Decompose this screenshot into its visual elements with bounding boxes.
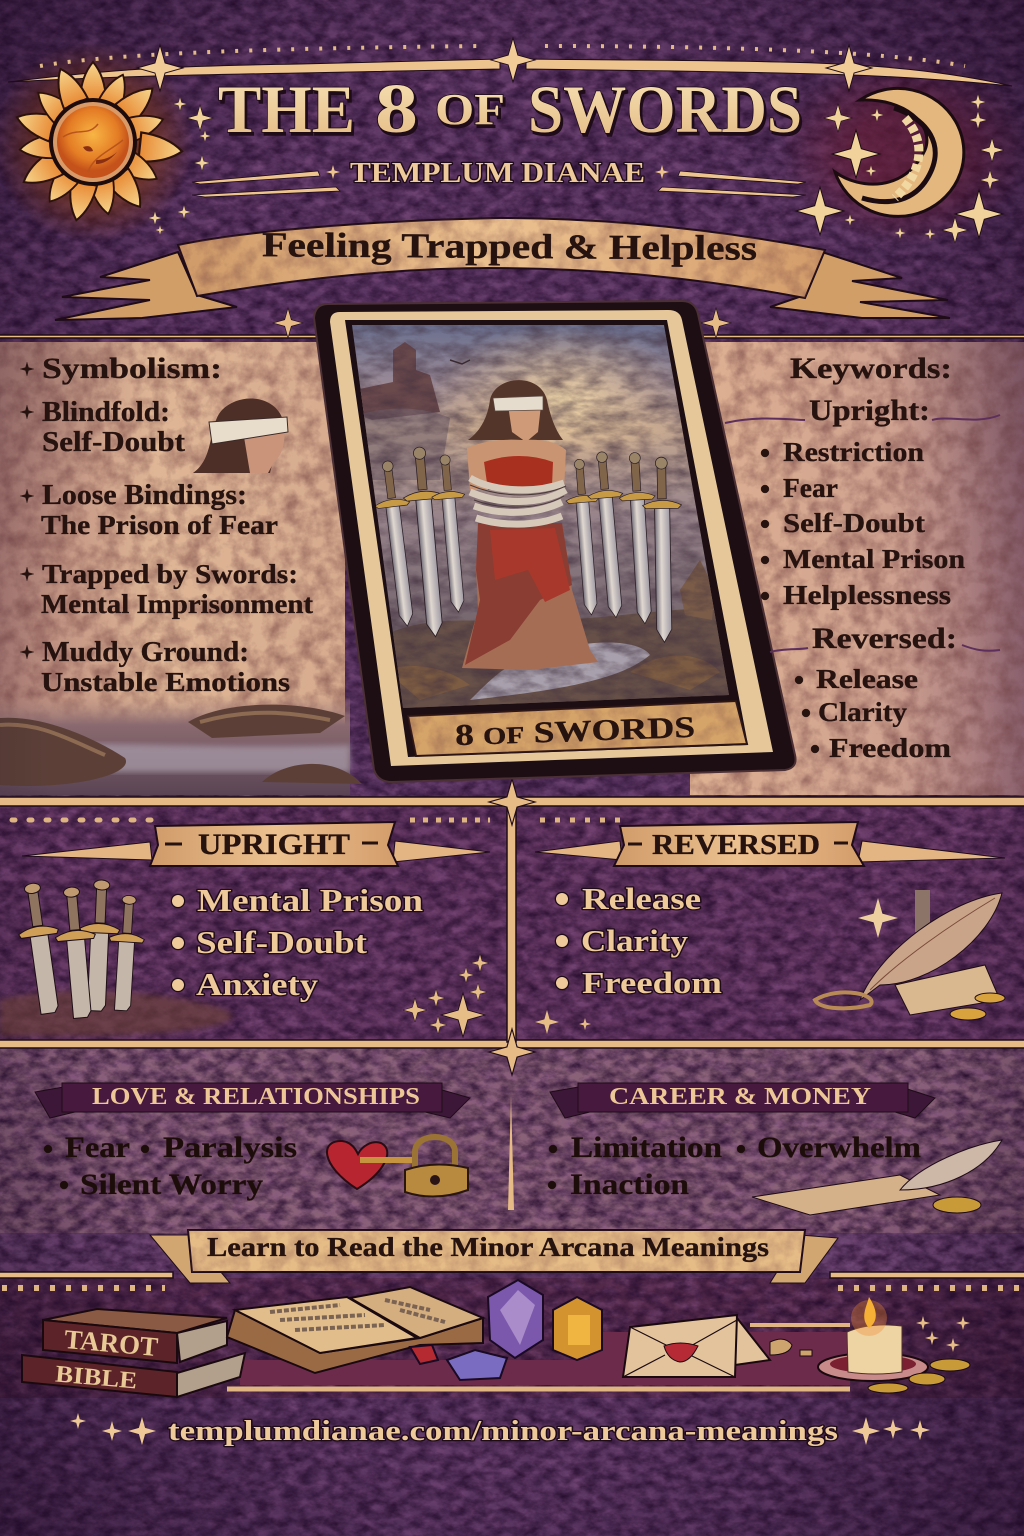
icon: moon and stars [148, 88, 1004, 243]
keywords text: Freedom [829, 733, 952, 763]
icon: quill and letter [815, 890, 1005, 1020]
symbolism text [20, 352, 313, 697]
panel: reversed: REVERSED [652, 829, 820, 861]
icon: quill and papers [752, 1140, 1002, 1215]
footer shelf [2, 1288, 1024, 1389]
tarot card: 8 OF SWORDS [455, 711, 696, 752]
panel: love and relationships: Paralysis [163, 1131, 297, 1164]
keywords text: Reversed: [812, 622, 957, 655]
panel: career and money: Inaction [570, 1168, 689, 1201]
panel: career and money: CAREER & MONEY [609, 1084, 871, 1110]
subtitle [192, 157, 806, 197]
symbolism text: Symbolism: [42, 352, 222, 385]
symbolism text: Trapped by Swords: [42, 559, 298, 589]
keywords text: Keywords: [790, 352, 952, 385]
panel: reversed: Release [582, 881, 701, 916]
panel: love and relationships: Fear [65, 1131, 130, 1164]
divider lines [0, 308, 1024, 1278]
keywords text: Restriction [783, 437, 924, 467]
panel: upright: Anxiety [196, 966, 318, 1002]
icon: books [22, 1309, 245, 1397]
symbolism text: Muddy Ground: [42, 637, 249, 668]
card illustration [340, 320, 740, 715]
keywords text: Clarity [818, 697, 908, 727]
url: templumdianae.com/minor-arcana-meanings [168, 1415, 838, 1447]
panel: upright: Self-Doubt [196, 924, 367, 960]
panel: career and money: Limitation [571, 1131, 722, 1164]
title: 8 [375, 71, 418, 148]
symbolism text: The Prison of Fear [41, 510, 278, 540]
panel: love and relationships: LOVE & RELATIONSHIPS [92, 1084, 420, 1110]
symbolism text: Self-Doubt [42, 427, 186, 458]
panel: reversed: Freedom [582, 965, 722, 1000]
icon: crystals [410, 1280, 602, 1380]
panel: love and relationships [35, 1083, 470, 1201]
panel: upright [0, 820, 490, 1037]
title: SWORDS [528, 71, 802, 147]
banner: learn to read: Learn to Read the Minor Arcana Meanings [207, 1232, 769, 1262]
icon: sun [13, 62, 184, 223]
banner: feeling trapped: Feeling Trapped & Helpless [262, 225, 757, 268]
symbolism text: Mental Imprisonment [41, 589, 313, 619]
icon: candle [818, 1297, 970, 1393]
banner: learn to read [150, 1230, 838, 1283]
keywords text: Release [816, 664, 918, 694]
keywords text: Helplessness [783, 580, 951, 610]
top ornament [8, 38, 1012, 91]
icon: swords [12, 879, 147, 1019]
panel: career and money: Overwhelm [757, 1131, 921, 1164]
panel: symbolism parchment [0, 342, 362, 795]
title: OF [435, 85, 505, 134]
panel: reversed: Clarity [581, 923, 689, 958]
icon: heart and lock [327, 1137, 468, 1197]
keywords text: Fear [783, 473, 838, 503]
icon: books: BIBLE [54, 1361, 138, 1395]
banner: feeling trapped [55, 218, 950, 320]
symbolism text: Unstable Emotions [41, 667, 290, 697]
panel: reversed [535, 820, 1005, 1034]
icon: blindfolded head [193, 399, 288, 473]
title [218, 71, 802, 148]
panel: upright: UPRIGHT [198, 828, 350, 861]
figure [462, 380, 598, 670]
icon: books: TAROT [63, 1324, 159, 1362]
panel: love and relationships: Silent Worry [80, 1168, 263, 1201]
keywords text: Mental Prison [783, 544, 965, 574]
panel: keywords parchment [690, 342, 1024, 795]
keywords text: Upright: [809, 394, 930, 427]
keywords text: Self-Doubt [783, 508, 925, 538]
symbolism text: Loose Bindings: [42, 480, 247, 511]
tarot card [314, 301, 796, 782]
url [70, 1413, 930, 1447]
title: THE [218, 71, 355, 147]
icon: envelope [623, 1315, 812, 1377]
keywords text [725, 352, 1000, 763]
subtitle: TEMPLUM DIANAE [350, 157, 645, 189]
panel: upright: Mental Prison [197, 882, 423, 918]
symbolism text: Blindfold: [42, 397, 170, 428]
panel: career and money [548, 1083, 1002, 1215]
icon: open book [227, 1287, 483, 1373]
